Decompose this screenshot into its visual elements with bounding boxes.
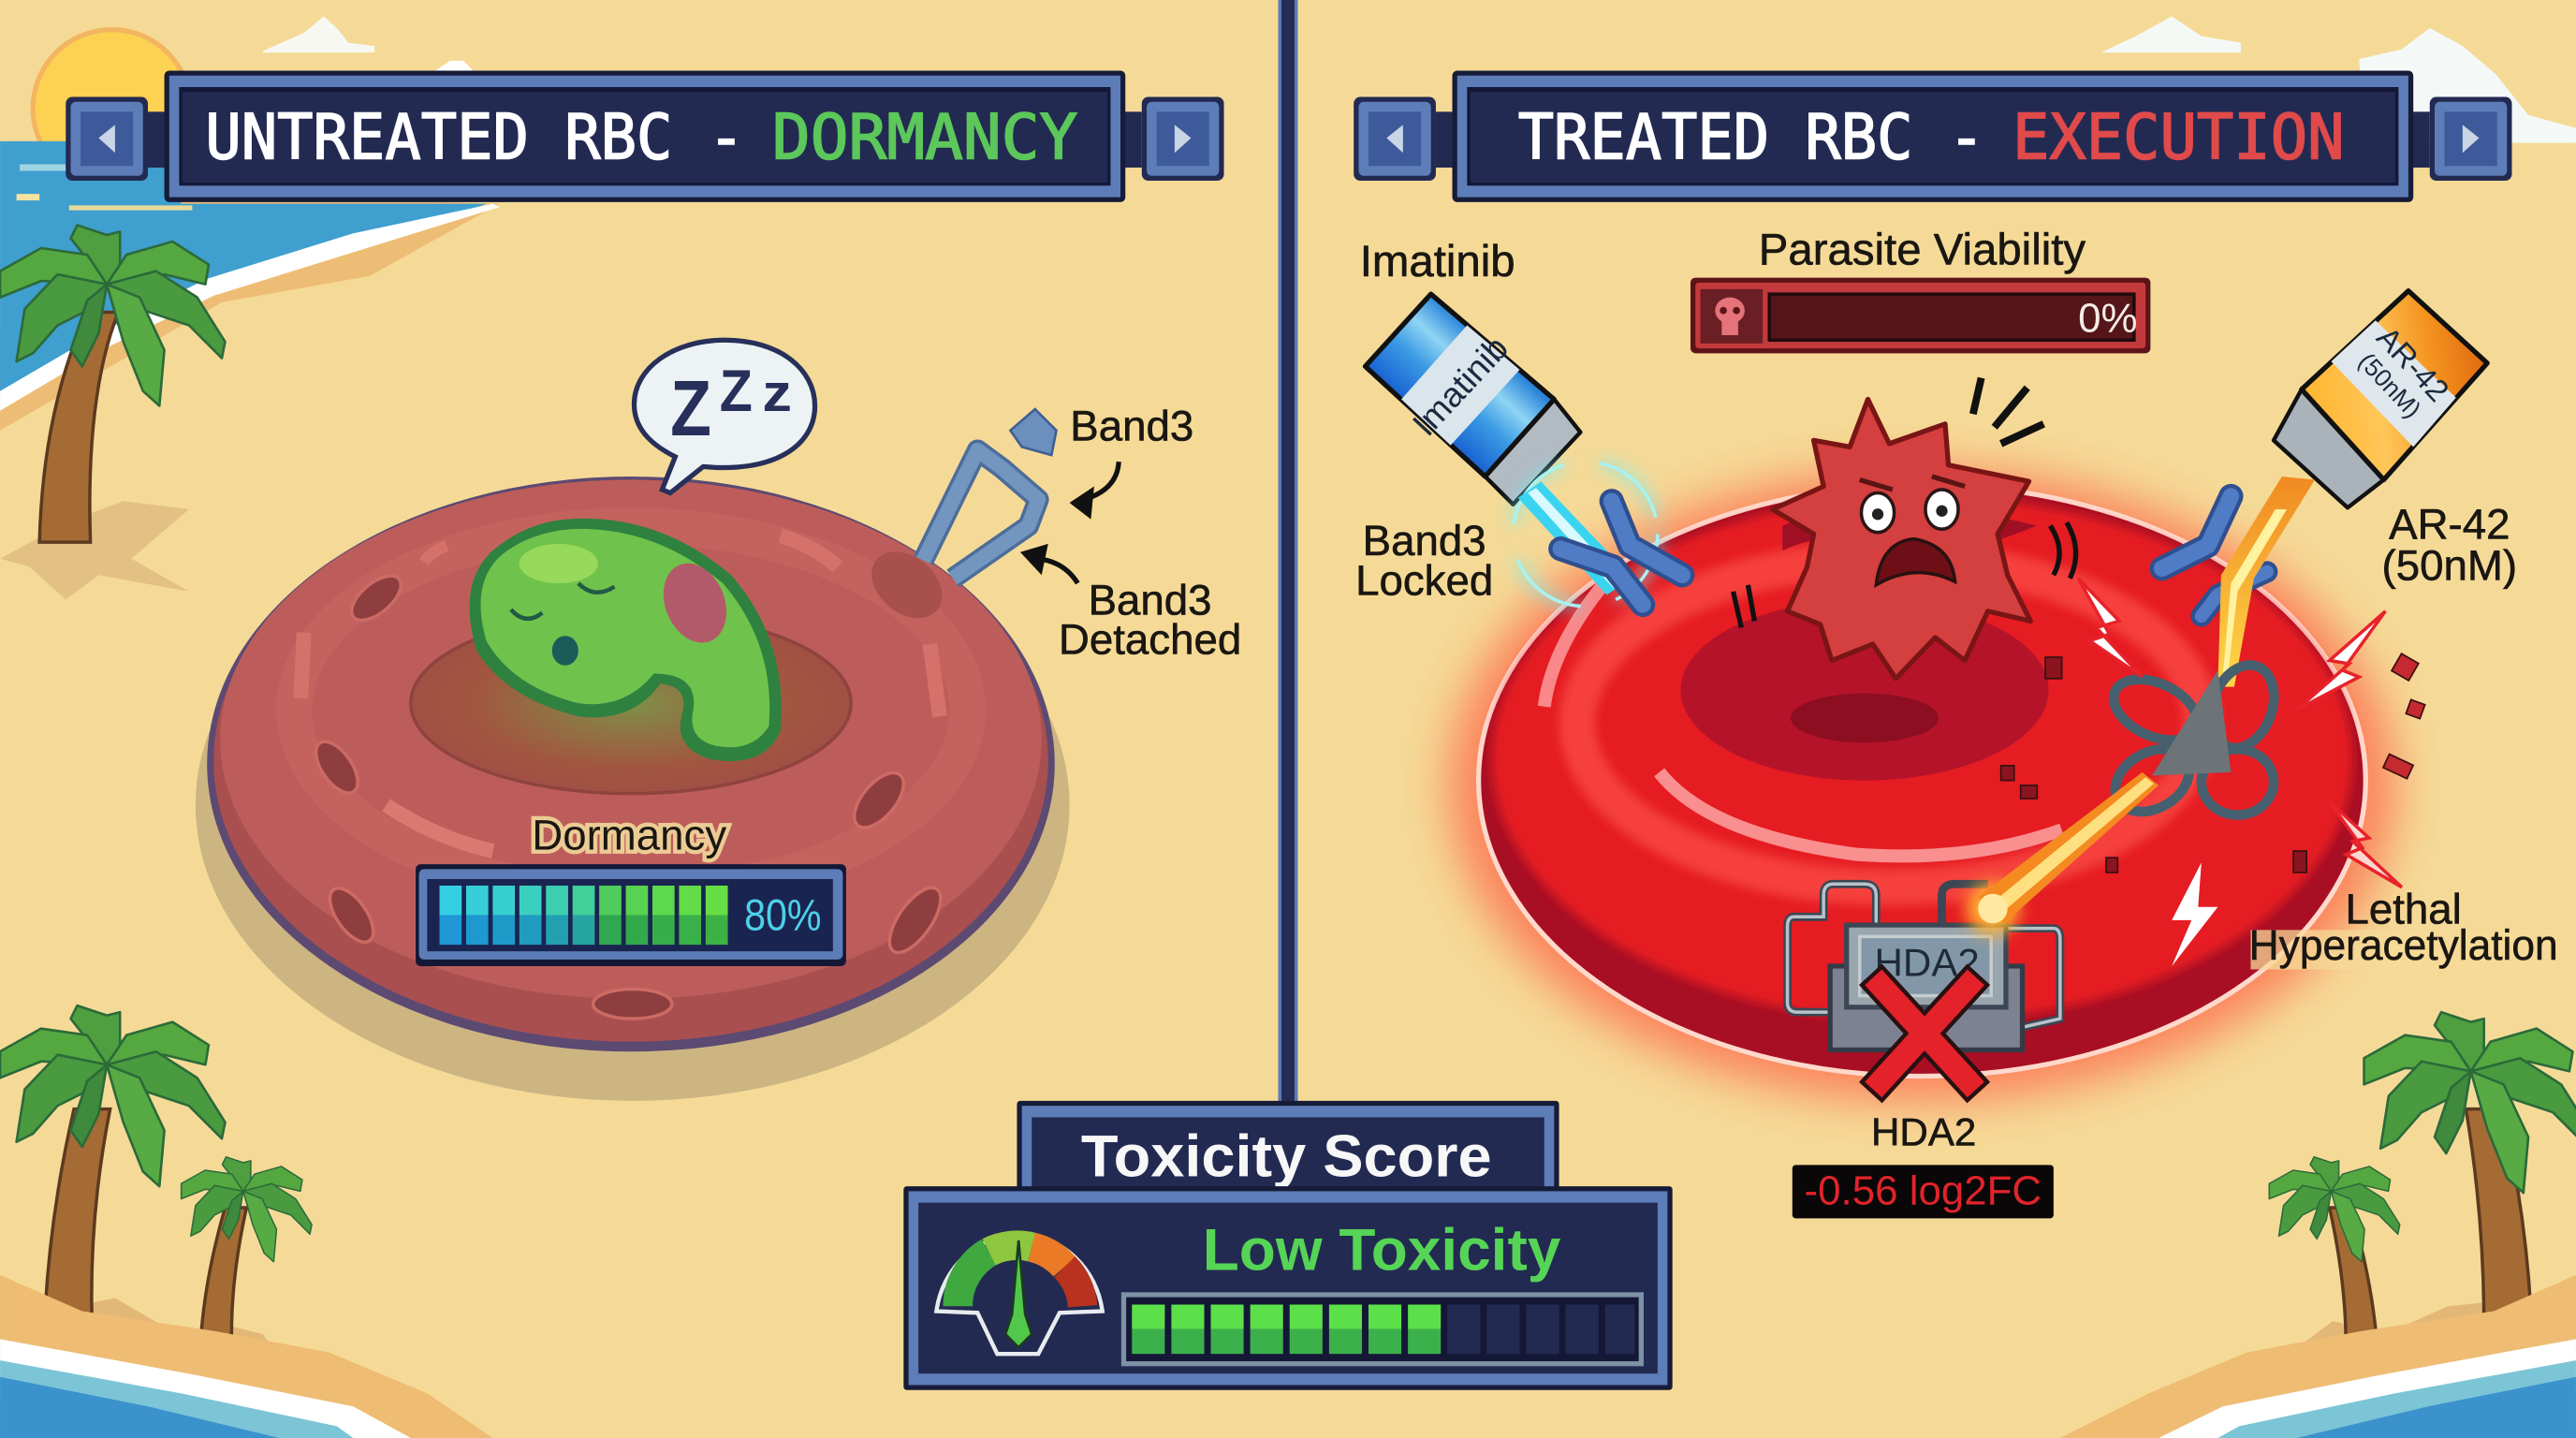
palm tree: lower right large [2364, 1012, 2576, 1357]
panel: untreated RBC [66, 70, 1241, 1101]
label: band3 locked: Band3 [1363, 517, 1486, 565]
label: band3 locked: Locked [1355, 556, 1493, 604]
palm tree: lower left large [0, 1005, 225, 1360]
panel: toxicity score [903, 1101, 1673, 1390]
sun [33, 30, 191, 187]
frightened face [1860, 477, 1965, 585]
label: dormancy: Dormancy [532, 811, 726, 858]
broken band3 structure [2104, 656, 2285, 825]
band3: locked protein [1560, 501, 1682, 605]
label: lethal hyperacetylation: Lethal [2346, 885, 2462, 932]
beam: to HDA2 [1967, 772, 2159, 935]
shock marks [1734, 378, 2076, 627]
progress bar: dormancy 80%: 80% [744, 890, 822, 940]
lightning bolts [2078, 579, 2402, 966]
debris [2001, 653, 2425, 873]
band3: detached protein [923, 409, 1057, 579]
palm tree: lower right small [2269, 1157, 2411, 1367]
speech bubble: zzz: Z [670, 364, 711, 452]
label: AR-42: AR-42 [2389, 501, 2510, 549]
red blood cell: treated [1449, 470, 2395, 1101]
title bar: treated: EXECUTION [2012, 100, 2344, 173]
label: lethal hyperacetylation [2249, 885, 2558, 969]
membrane pits [308, 538, 955, 1019]
arrow: to band3 [1070, 462, 1119, 520]
panel: treated RBC [1354, 70, 2558, 1218]
band3: right protein [2162, 496, 2267, 616]
panel body [903, 1186, 1673, 1390]
label: band3: Band3 [1070, 402, 1193, 449]
bottle: imatinib [1365, 294, 1580, 505]
red blood cell: dormant [196, 477, 1070, 1101]
red x [1881, 986, 1969, 1081]
speech bubble: zzz [634, 340, 815, 493]
enzyme: HDA2 inhibited [1788, 884, 2060, 1081]
progress bar: dormancy 80% [416, 864, 846, 966]
label: HDA2: HDA2 [1871, 1109, 1976, 1153]
speech bubble: zzz: Z [720, 359, 753, 424]
gauge: parasite viability 0%: 0% [2078, 296, 2138, 342]
label: band3 detached: Band3 [1089, 576, 1212, 624]
icon: gauge [936, 1235, 1103, 1354]
palm tree: lower left small [181, 1157, 312, 1367]
tab: toxicity score heading: Toxicity Score [1081, 1124, 1492, 1190]
parasite: star dying [1773, 399, 2030, 679]
title bar: untreated: DORMANCY [772, 100, 1077, 173]
title bar: untreated [66, 70, 1224, 202]
sea: bottom right [2060, 1275, 2576, 1438]
title bar: treated [1354, 70, 2511, 202]
parasite: sleeping green [470, 519, 782, 761]
label: imatinib: Imatinib [1360, 237, 1515, 286]
enzyme: HDA2 inhibited: HDA2 [1875, 940, 1980, 984]
bottle: AR-42: (50nM) [2353, 347, 2427, 423]
title bar: untreated: UNTREATED RBC - [205, 100, 744, 173]
arrow: to band3 detached [1020, 544, 1077, 583]
bar: toxicity level [1123, 1295, 1641, 1364]
label: lethal hyperacetylation: Hyperacetylation [2249, 921, 2558, 969]
beam: imatinib [1513, 462, 1658, 607]
title bar: treated: TREATED RBC - [1518, 100, 1984, 173]
palm tree: top left [0, 225, 225, 600]
tab: toxicity score heading [1017, 1101, 1559, 1199]
bottle: AR-42 [2274, 291, 2487, 507]
speech bubble: zzz: z [762, 363, 792, 422]
label: AR-42: (50nM) [2382, 542, 2517, 590]
icon: skull [1715, 298, 1745, 335]
label: band3 detached: Detached [1059, 616, 1241, 664]
center divider [1278, 0, 1298, 1104]
sea: top left [0, 141, 500, 431]
food vacuole [652, 554, 738, 653]
beam: AR-42 [2217, 477, 2315, 687]
status: low toxicity: Low Toxicity [1203, 1218, 1560, 1284]
value: log2FC: -0.56 log2FC [1805, 1167, 2042, 1213]
clouds [263, 17, 2576, 143]
bottle: imatinib: Imatinib [1405, 329, 1515, 443]
bottle: AR-42: AR-42 [2369, 320, 2455, 409]
label: parasite viability: Parasite Viability [1759, 226, 2086, 275]
gauge: parasite viability 0% [1690, 278, 2150, 353]
sea: bottom left [0, 1275, 493, 1438]
sleeping face [511, 583, 614, 666]
